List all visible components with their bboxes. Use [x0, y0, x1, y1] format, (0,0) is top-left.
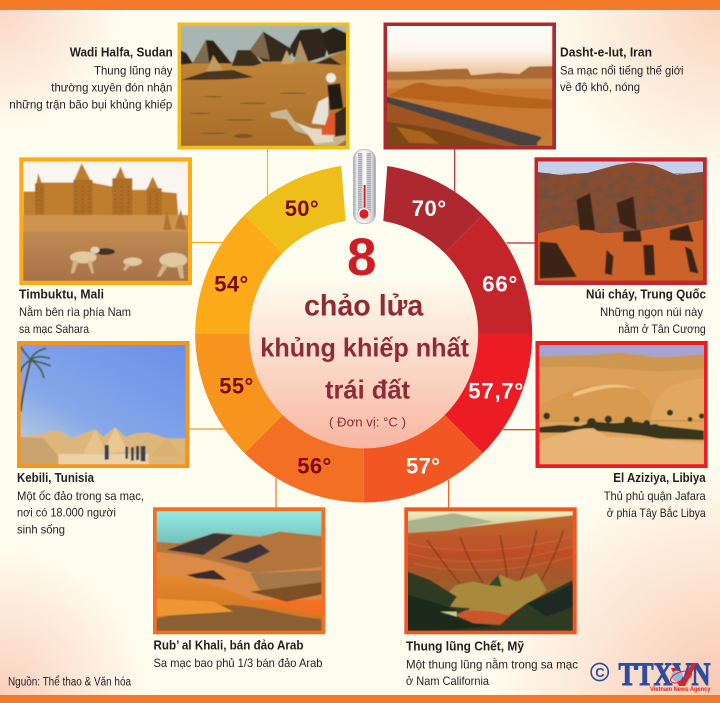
caption: Timbuktu: sa mạc Sahara — [19, 322, 89, 336]
title: 8 chảo lửa khủng khiếp nhất trái đất: khủng khiếp nhất — [260, 333, 469, 363]
caption: Rub' al Khali: Sa mạc bao phủ 1/3 bán đảo Arab — [154, 656, 323, 670]
segment: 57 — [364, 415, 483, 502]
photo: Kebili oasis rocks and palm — [15, 340, 192, 470]
bottom bar — [0, 695, 720, 703]
panel: Timbuktu, Mali — [18, 156, 223, 336]
panel: Dasht-e-lut, Iran — [383, 20, 684, 193]
caption: Kebili: nơi có 18.000 người — [17, 506, 116, 520]
title: 8 chảo lửa khủng khiếp nhất trái đất: chảo lửa — [304, 290, 424, 323]
photo: Death Valley crater — [403, 507, 578, 634]
caption: El Aziziya — [604, 471, 707, 520]
ring chart of temperatures — [195, 166, 532, 502]
caption: Rub' al Khali — [154, 638, 323, 670]
caption: Dasht-e-lut: về độ khô, nóng — [560, 80, 640, 94]
caption: Kebili: Kebili, Tunisia — [17, 471, 95, 485]
caption: Núi cháy: Núi cháy, Trung Quốc — [586, 288, 706, 302]
caption: Kebili — [17, 471, 144, 536]
logo: TTXVN: Vietnam News Agency — [650, 686, 711, 693]
caption: Timbuktu — [19, 288, 131, 336]
caption: Núi cháy: nằm ở Tân Cương — [618, 321, 706, 336]
caption: Wadi Halfa: những trận bão bụi khủng khiếp — [9, 98, 173, 112]
caption: Dasht-e-lut: Dasht-e-lut, Iran — [560, 46, 652, 60]
segment: 57,7 — [445, 334, 532, 453]
caption: Kebili: Một ốc đảo trong sa mạc, — [17, 489, 144, 503]
photo: Wadi Halfa pyramids and camel rider — [177, 20, 350, 150]
caption: El Aziziya: Thủ phủ quận Jafara — [604, 489, 706, 503]
title: 8 chảo lửa khủng khiếp nhất trái đất — [260, 228, 469, 430]
icon: thermometer — [342, 150, 387, 224]
caption: Thung lũng Chết: ở Nam California — [406, 674, 489, 688]
panel: Thung lũng Chết, Mỹ — [403, 480, 578, 688]
centre circle — [249, 219, 479, 449]
caption: Thung lũng Chết: Thung lũng Chết, Mỹ — [406, 640, 524, 654]
segment: 56: 56° — [297, 453, 331, 478]
source note: Nguồn: Thể thao & Văn hóa — [8, 677, 132, 689]
icon: copyright — [591, 663, 608, 681]
caption: Thung lũng Chết — [406, 640, 578, 688]
photo: El Aziziya dunes and palms — [533, 340, 710, 468]
icon: copyright: C — [595, 665, 605, 680]
panel: Kebili, Tunisia — [15, 340, 225, 536]
caption: Núi cháy — [586, 288, 706, 336]
segment: 54 — [195, 215, 283, 334]
segment: 50 — [245, 166, 346, 253]
segment: 55 — [195, 334, 283, 453]
title: 8 chảo lửa khủng khiếp nhất trái đất: ( Đơn vị: °C ) — [329, 415, 406, 430]
title: 8 chảo lửa khủng khiếp nhất trái đất: 8 — [347, 228, 376, 287]
segment: 54: 54° — [214, 272, 248, 297]
caption: Wadi Halfa: thường xuyên đón nhận — [51, 80, 172, 94]
caption: Núi cháy: Những ngọn núi này — [600, 305, 703, 319]
photo: Rub' al Khali dunes — [152, 507, 327, 637]
segment: 70 — [383, 166, 483, 253]
photo: Flaming Mountains — [533, 156, 708, 285]
panel: El Aziziya, Libiya — [503, 340, 710, 520]
caption: El Aziziya: ở phía Tây Bắc Libya — [607, 505, 706, 520]
caption: Kebili: sinh sống — [17, 522, 65, 536]
title: 8 chảo lửa khủng khiếp nhất trái đất: trái đất — [325, 374, 410, 404]
segment: 57,7: 57,7° — [468, 378, 523, 403]
caption: Timbuktu: Timbuktu, Mali — [19, 288, 104, 302]
photo: Timbuktu mud mosque and sheep — [18, 156, 193, 285]
segment: 66 — [445, 215, 532, 334]
panel: Wadi Halfa, Sudan — [9, 20, 350, 195]
caption: Wadi Halfa: Thung lũng này — [94, 64, 172, 78]
segment: 70: 70° — [412, 196, 446, 221]
caption: Rub' al Khali: Rub’ al Khali, bán đảo Arab — [154, 638, 304, 652]
caption: El Aziziya: El Aziziya, Libiya — [613, 471, 707, 485]
caption: Dasht-e-lut — [560, 46, 684, 94]
segment: 66: 66° — [482, 272, 517, 297]
caption: Thung lũng Chết: Một thung lũng nằm trong sa mạc — [406, 656, 578, 671]
caption: Dasht-e-lut: Sa mạc nổi tiếng thế giới — [560, 64, 684, 78]
segment: 55: 55° — [219, 373, 253, 398]
caption: Wadi Halfa: Wadi Halfa, Sudan — [70, 46, 173, 60]
segment: 56 — [245, 415, 364, 502]
segment: 57: 57° — [406, 453, 440, 478]
panel: Rub' al Khali, bán đảo Arab — [152, 478, 327, 670]
top bar — [0, 0, 720, 10]
caption: Timbuktu: Nằm bên rìa phía Nam — [19, 304, 131, 319]
photo: Dasht-e-lut desert road — [383, 20, 556, 150]
panel: Núi cháy, Trung Quốc — [506, 156, 708, 336]
segment: 50: 50° — [285, 196, 319, 221]
caption: Wadi Halfa — [9, 46, 173, 112]
